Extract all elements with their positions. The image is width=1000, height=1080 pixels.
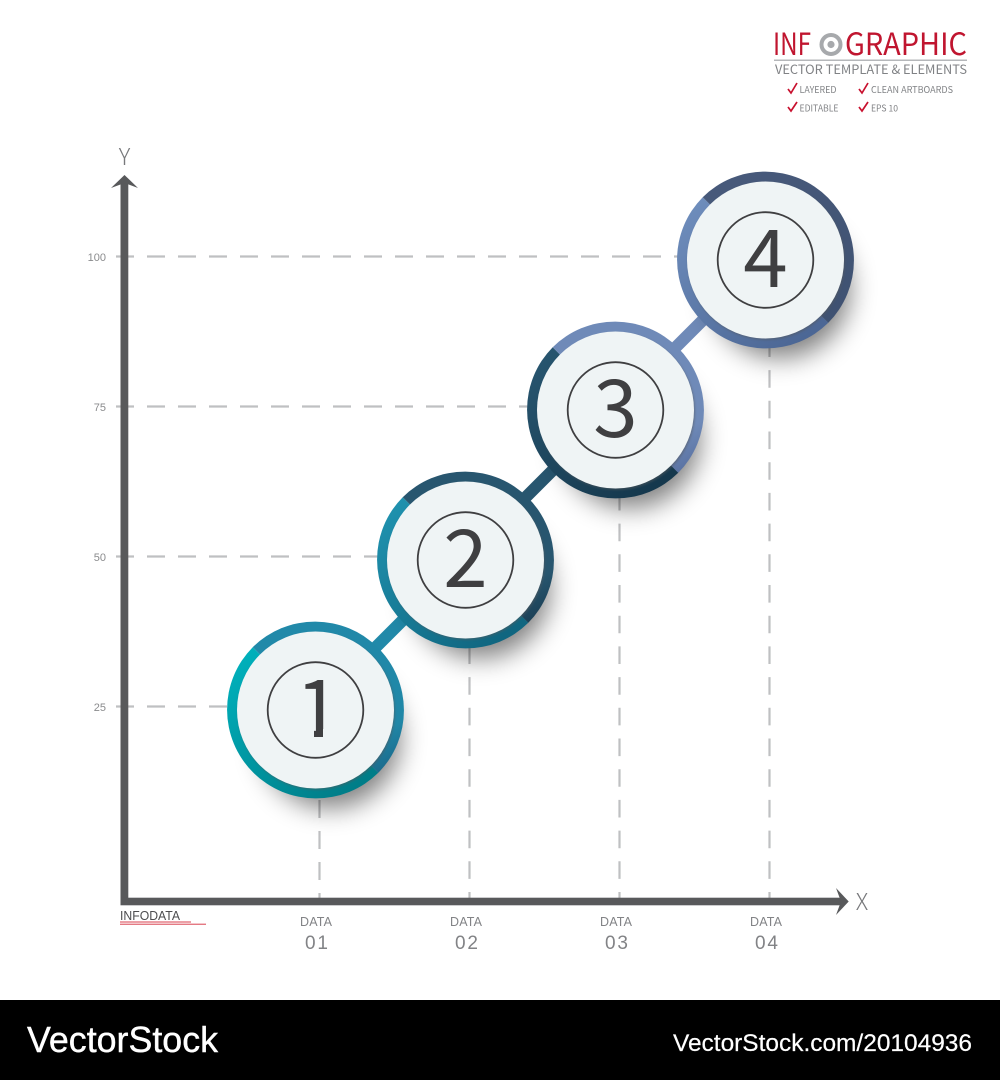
connector lines bbox=[360, 303, 720, 663]
x axis category labels: 03 bbox=[605, 933, 628, 954]
logo title: GRAPHIC bbox=[845, 19, 967, 64]
logo checklist bbox=[788, 83, 953, 114]
y axis ticks bbox=[88, 252, 106, 714]
x axis category labels: DATA bbox=[300, 915, 333, 929]
watermark url: VectorStock.com/20104936 bbox=[673, 1030, 972, 1057]
x axis category labels: DATA bbox=[600, 915, 633, 929]
logo: infographic badge bbox=[773, 19, 967, 114]
x axis category labels: DATA bbox=[450, 915, 483, 929]
axis label Y: Y bbox=[119, 138, 131, 172]
logo checklist: CLEAN ARTBOARDS bbox=[871, 83, 953, 96]
infodata label bbox=[120, 909, 206, 925]
node 1 bbox=[227, 622, 404, 808]
infodata label: INFODATA bbox=[120, 909, 181, 923]
y axis ticks: 100 bbox=[88, 252, 106, 264]
logo title bbox=[773, 19, 967, 64]
node 4 bbox=[677, 172, 854, 358]
horizontal dashed guide lines bbox=[116, 256, 680, 706]
logo subtitle: VECTOR TEMPLATE & ELEMENTS bbox=[775, 59, 967, 78]
y axis ticks: 75 bbox=[94, 402, 106, 414]
node 3: 3 bbox=[593, 345, 638, 461]
watermark footer bar bbox=[0, 1000, 1000, 1080]
x axis category labels: DATA bbox=[750, 915, 783, 929]
x axis category labels: 02 bbox=[455, 933, 478, 954]
node 2: 2 bbox=[443, 495, 488, 611]
y axis with arrow bbox=[111, 175, 138, 905]
logo checklist: LAYERED bbox=[800, 83, 836, 96]
vertical dashed guide lines bbox=[320, 339, 770, 900]
logo checklist: EPS 10 bbox=[871, 102, 898, 114]
watermark brand: VectorStock bbox=[27, 1019, 219, 1060]
x axis category labels: 04 bbox=[755, 933, 778, 954]
logo checklist: EDITABLE bbox=[800, 102, 838, 114]
node 3 bbox=[527, 322, 704, 508]
x axis category labels bbox=[300, 915, 783, 954]
y axis ticks: 25 bbox=[94, 702, 106, 714]
axis label X: X bbox=[856, 883, 869, 917]
x axis with arrow bbox=[120, 888, 849, 915]
logo title: INF bbox=[773, 19, 811, 64]
node 4: 4 bbox=[743, 195, 788, 311]
node 1: 1 bbox=[296, 645, 340, 761]
y axis ticks: 50 bbox=[94, 552, 106, 564]
x axis category labels: 01 bbox=[305, 933, 328, 954]
node 2 bbox=[377, 472, 554, 658]
